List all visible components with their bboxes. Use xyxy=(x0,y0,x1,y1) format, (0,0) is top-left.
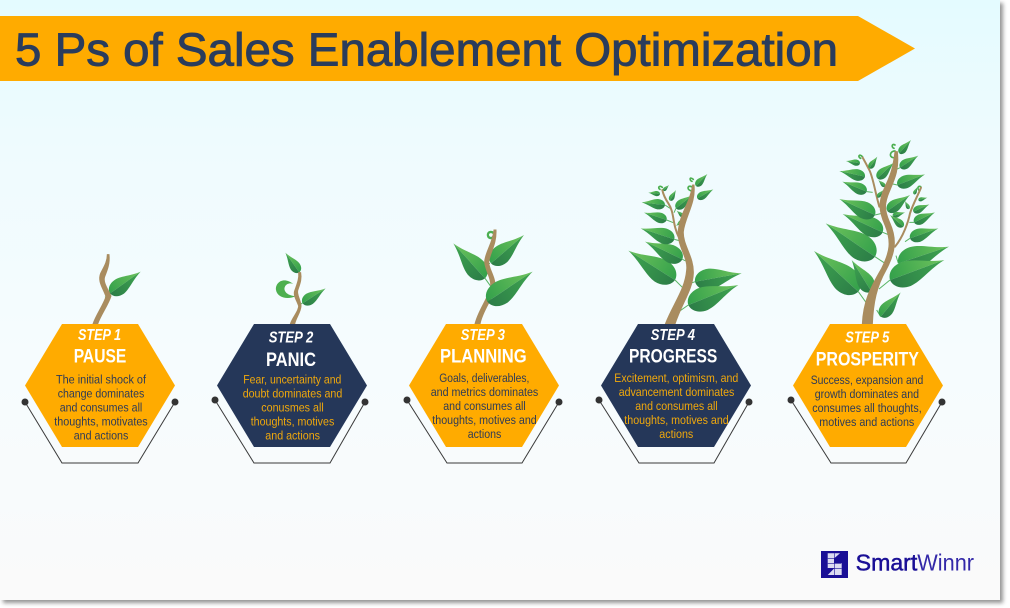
plant 3 upper right leaf xyxy=(485,228,530,271)
plant 4 left branch xyxy=(662,190,679,238)
step 4 text xyxy=(614,371,738,441)
step 2 text: conusmes all xyxy=(261,400,324,414)
step 3 bracket xyxy=(404,396,562,463)
plant 2 top leaf xyxy=(281,250,304,275)
step 2 text: and actions xyxy=(265,428,320,442)
step 4 hexagon xyxy=(601,324,751,447)
step 2 text: doubt dominates and xyxy=(243,386,342,400)
step 3 text: and consumes all xyxy=(443,399,526,413)
step 2 xyxy=(212,324,368,463)
step 3 text: thoughts, motives and xyxy=(432,413,537,427)
step 5 heading: PROSPERITY xyxy=(816,350,919,371)
plant 1 stem xyxy=(93,255,111,324)
title banner xyxy=(0,16,915,81)
plant 3 left leaf xyxy=(446,236,493,285)
plant 3 curl xyxy=(488,232,494,238)
step 4 text: and consumes all xyxy=(635,399,718,413)
step 5 bracket xyxy=(788,396,946,463)
step 1 bracket xyxy=(22,398,178,463)
step 5 xyxy=(788,324,946,463)
step 5 hexagon xyxy=(793,324,943,447)
step 5 text: motives and actions xyxy=(819,415,914,429)
plant 1 leaf stalk xyxy=(105,293,112,297)
plant 5 main stem xyxy=(862,152,898,324)
step 1 hexagon xyxy=(25,324,175,447)
banner arrow xyxy=(0,16,915,81)
step 2 label: STEP 2 xyxy=(269,330,313,347)
step 2 text: thoughts, motives xyxy=(251,414,334,428)
plant 4 leaves xyxy=(622,172,743,316)
plant 2 curled shoot xyxy=(276,280,296,298)
plant 5 left branch xyxy=(863,158,879,207)
step 1 label: STEP 1 xyxy=(78,327,121,344)
step 4 xyxy=(596,324,752,463)
step 3 label: STEP 3 xyxy=(461,327,505,344)
SmartWinnr logo xyxy=(821,550,974,578)
plant 5 stalks xyxy=(858,168,914,317)
step 2 text: Fear, uncertainty and xyxy=(243,372,341,386)
plant 2 right leaf xyxy=(299,283,329,308)
step 4 text: actions xyxy=(659,427,693,441)
step 4 bracket xyxy=(596,396,752,463)
step 4 text: advancement dominates xyxy=(619,385,734,399)
step 2 hexagon xyxy=(217,324,367,447)
step 2 bracket xyxy=(212,396,368,463)
step 5 text: growth dominates and xyxy=(815,387,919,401)
logo wordmark Smart: Smart xyxy=(856,550,918,576)
plant 4 main stem xyxy=(665,185,694,324)
step 1 text xyxy=(54,372,148,442)
plant 5 curls xyxy=(859,145,921,190)
plant 4 curls xyxy=(659,178,693,191)
plant 3 lower right leaf xyxy=(481,262,539,312)
logo wordmark Winnr: Winnr xyxy=(917,550,974,576)
plant 4 stalks xyxy=(665,205,695,313)
step 4 text: thoughts, motives and xyxy=(624,413,729,427)
plant 2 leaf stalk xyxy=(298,302,304,306)
step 5 label: STEP 5 xyxy=(845,330,890,347)
plant 1 leaf xyxy=(105,265,145,300)
step 5 text xyxy=(811,373,923,429)
step 3 text xyxy=(431,371,538,441)
plant 5 right branch xyxy=(895,188,921,247)
step 3 text: and metrics dominates xyxy=(431,385,538,399)
step 5 text: consumes all thoughts, xyxy=(812,401,922,415)
step 1 xyxy=(22,324,178,463)
step 4 heading: PROGRESS xyxy=(629,347,717,368)
step 1 text: and actions xyxy=(74,428,128,442)
step 2 text xyxy=(243,372,342,442)
plant 5 xyxy=(805,137,953,324)
step 3 text: Goals, deliverables, xyxy=(439,371,529,385)
plant 5 leaves xyxy=(805,137,953,321)
step 4 text: Excitement, optimism, and xyxy=(614,371,738,385)
plant 3 leaf stalks xyxy=(482,263,491,308)
step 3 text: actions xyxy=(468,427,501,441)
plant 3 stem xyxy=(475,230,496,324)
step 2 heading: PANIC xyxy=(266,350,316,371)
step 4 label: STEP 4 xyxy=(651,327,695,344)
plant 2 xyxy=(276,250,329,324)
plant 1 xyxy=(93,255,145,324)
plant 4 xyxy=(622,172,743,324)
step 3 hexagon xyxy=(409,324,559,447)
logo mark xyxy=(821,551,848,578)
step 1 heading: PAUSE xyxy=(74,347,126,368)
plant 3 xyxy=(446,228,539,324)
step 1 text: The initial shock of xyxy=(56,372,146,386)
title: 5 Ps of Sales Enablement Optimization xyxy=(15,24,838,76)
step 3 xyxy=(404,324,562,463)
step 1 text: thoughts, motivates xyxy=(54,414,148,428)
step 1 text: and consumes all xyxy=(60,400,142,414)
step 1 text: change dominates xyxy=(58,386,144,400)
plant 2 stem xyxy=(290,273,301,324)
step 5 text: Success, expansion and xyxy=(811,373,923,387)
step 3 heading: PLANNING xyxy=(440,347,527,368)
